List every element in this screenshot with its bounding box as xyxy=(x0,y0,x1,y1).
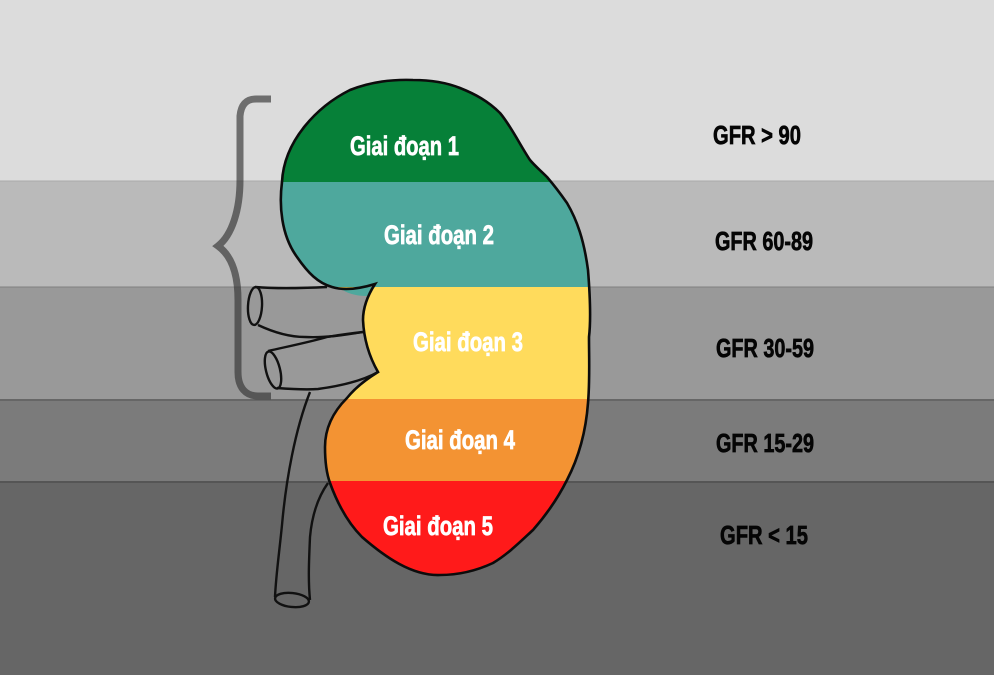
lower vessel xyxy=(262,332,378,390)
kidney outline xyxy=(281,80,590,575)
stage 2 label: Giai đoạn 2 xyxy=(384,220,494,250)
blood vessels and ureter xyxy=(247,287,378,609)
teal overflow below the kidney notch xyxy=(340,287,372,296)
GFR stage 1: GFR > 90 xyxy=(713,120,801,150)
stage 4 label: Giai đoạn 4 xyxy=(405,425,515,455)
GFR stage 3: GFR 30-59 xyxy=(716,333,814,363)
upper vessel xyxy=(247,287,363,337)
GFR stage 5: GFR < 15 xyxy=(720,520,808,550)
GFR values xyxy=(713,120,814,550)
stage 3 label: Giai đoạn 3 xyxy=(413,327,523,357)
kidney colour stages xyxy=(282,81,589,574)
stage 5 label: Giai đoạn 5 xyxy=(383,511,493,541)
stage labels xyxy=(350,131,523,541)
GFR stage 4: GFR 15-29 xyxy=(716,428,814,458)
stage 1 label: Giai đoạn 1 xyxy=(350,131,459,161)
brace xyxy=(218,99,271,396)
GFR stage 2: GFR 60-89 xyxy=(715,226,813,256)
ureter xyxy=(274,392,328,609)
